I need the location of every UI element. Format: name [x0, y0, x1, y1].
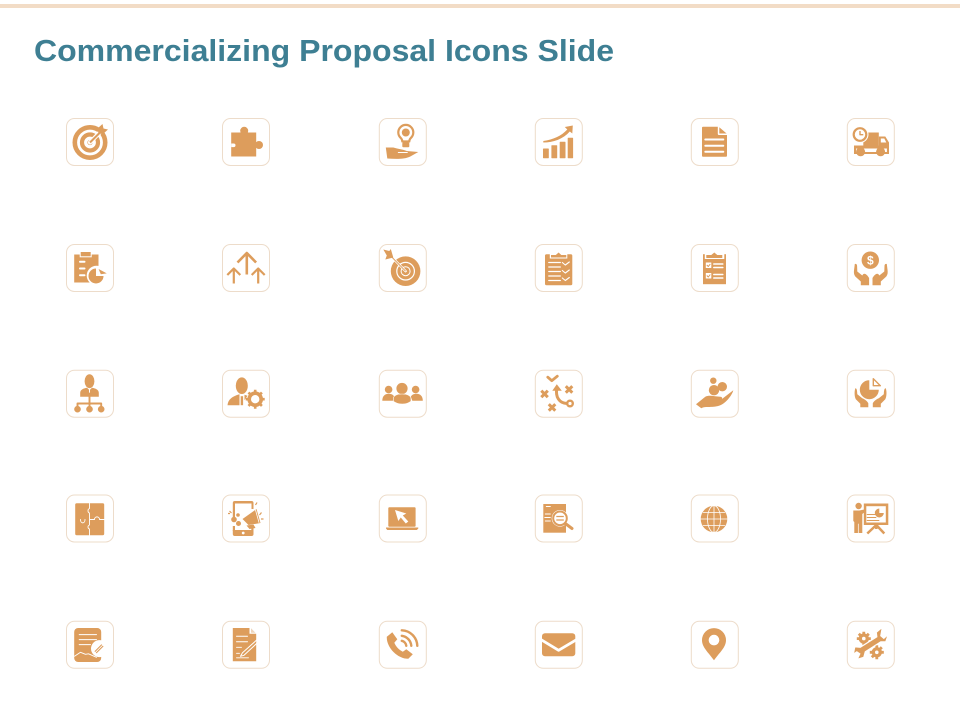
icon: globe	[691, 495, 738, 542]
icon: manager org chart	[66, 370, 114, 417]
icon: document with magnifier	[535, 495, 582, 542]
icon: four puzzle pieces	[66, 495, 114, 542]
icon: team of three people	[379, 370, 426, 417]
icon: wrench and gears	[847, 621, 894, 668]
icon: clipboard with pie chart	[66, 244, 114, 292]
icon: rising bar chart	[535, 118, 582, 166]
icon: telephone with signal	[379, 621, 426, 668]
icon: hands holding dollar coin: $	[867, 254, 874, 268]
icon: three up arrows	[222, 244, 270, 292]
icon: clipboard checklist with ticks	[535, 244, 582, 292]
icon: hands holding dollar coin	[847, 244, 894, 292]
icon: lightbulb over hand	[379, 118, 426, 166]
icon: hands holding pie chart	[847, 370, 894, 417]
icon: target with arrow	[66, 118, 114, 166]
icon: strategy path	[535, 370, 582, 417]
icon: envelope	[535, 621, 582, 668]
icon: businessman with gear	[222, 370, 270, 417]
icon: clipboard with checkboxes	[691, 244, 738, 292]
icon: delivery truck with clock	[847, 118, 894, 166]
icon: location pin	[691, 621, 738, 668]
icon: presenter at board	[847, 495, 894, 542]
icon: document	[691, 118, 738, 166]
icon: laptop with cursor	[379, 495, 426, 542]
icon: phone with megaphone	[222, 495, 270, 542]
icon: document with pen	[222, 621, 270, 668]
title: Commercializing Proposal Icons Slide	[34, 33, 614, 68]
top accent bar	[0, 4, 960, 8]
icon: signed contract	[66, 621, 114, 668]
icon: dart in bullseye	[379, 244, 426, 292]
icon: puzzle piece	[222, 118, 270, 166]
icon: hand with coins	[691, 370, 738, 417]
